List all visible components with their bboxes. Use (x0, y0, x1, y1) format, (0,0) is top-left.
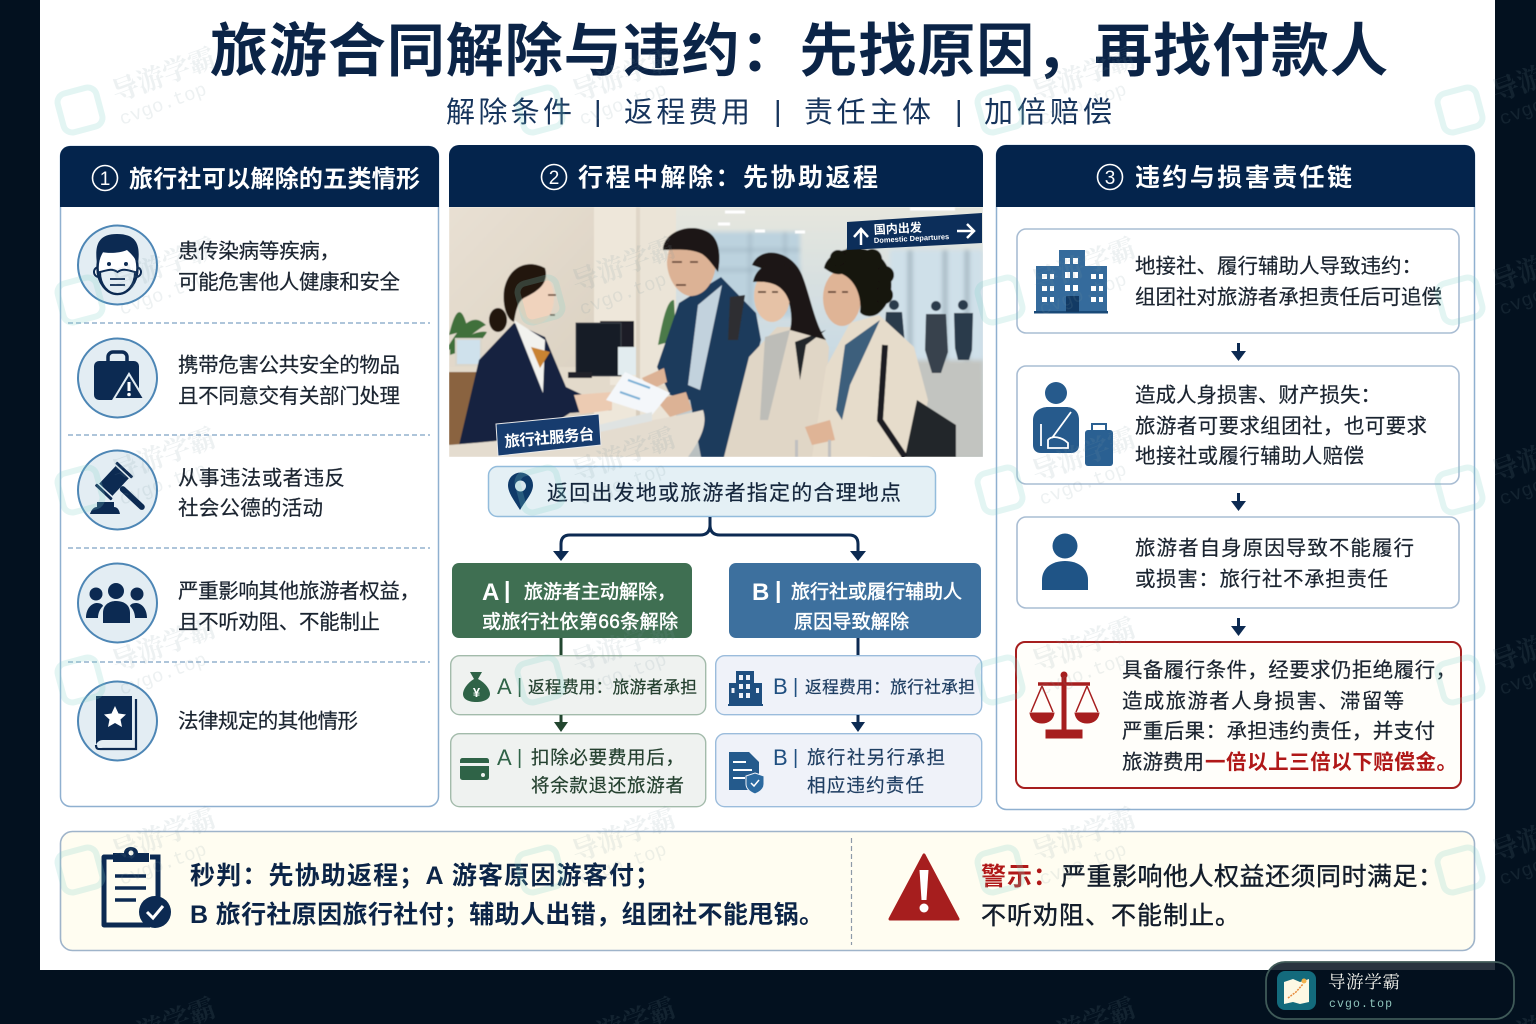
watermark pattern: 导游学霸 (108, 613, 220, 678)
watermark pattern: 导游学霸 (1028, 233, 1140, 298)
logo badge (1266, 962, 1514, 1019)
watermark pattern: 导游学霸 (1028, 43, 1140, 108)
sign: domestic departures (847, 213, 982, 250)
box: B liability: 相应违约责任 (807, 775, 924, 796)
text: dangerous goods: 且不同意交有关部门处理 (178, 385, 400, 408)
watermark pattern: 导游学霸 (1028, 803, 1140, 868)
text: warning (981, 863, 1443, 930)
box: B return cost: B (773, 674, 788, 699)
icon: money bag: ¥ (473, 685, 481, 700)
box: injury and property loss: 地接社或履行辅助人赔偿 (1135, 445, 1364, 468)
box: case B: 旅行社或履行辅助人 (791, 581, 962, 603)
box: traveller's own cause: 或损害：旅行社不承担责任 (1135, 568, 1388, 591)
arrow 1 (1231, 343, 1246, 361)
arrow 3 (1231, 618, 1246, 636)
icon: document shield (729, 752, 764, 794)
icon: law book (78, 682, 157, 760)
watermark pattern: 导游学霸 (1028, 613, 1140, 678)
box: case B: | (775, 577, 781, 603)
watermark pattern: cvgo.top (117, 649, 210, 701)
panel 1 header: 旅行社可以解除的五类情形 (129, 166, 420, 193)
watermark pattern: 导游学霸 (568, 233, 680, 298)
box: case A: 或旅行社依第66条解除 (482, 611, 678, 633)
watermark pattern: cvgo.top (577, 839, 670, 891)
box: refusal and punitive damages: 旅游费用 (1122, 751, 1204, 774)
box: case B: B (752, 579, 769, 606)
panel 2 header (449, 145, 983, 207)
subtitle: 解除条件 (446, 96, 572, 129)
watermark pattern: 导游学霸 (568, 43, 680, 108)
agent (459, 323, 612, 457)
panel: return assistance (449, 145, 983, 807)
logo text (1328, 972, 1400, 1011)
subtitle: | (594, 96, 602, 128)
box: refusal and punitive damages (1016, 642, 1461, 788)
box: B liability: | (793, 747, 798, 769)
icon: map pin (508, 472, 533, 510)
icon: bank card (460, 758, 489, 780)
destination box: 返回出发地或旅游者指定的合理地点 (547, 482, 901, 505)
arrow 2 (1231, 493, 1246, 511)
text: warning: 警示： (981, 863, 1058, 891)
box: A return cost: A (497, 674, 512, 699)
icon: scales of justice (1030, 672, 1099, 738)
text: dangerous goods (178, 354, 400, 408)
watermark pattern: 导游学霸 (568, 613, 680, 678)
box: A refund: A (497, 745, 512, 770)
watermark pattern: cvgo.top (1037, 839, 1130, 891)
icon: masked face (78, 226, 157, 304)
man (657, 277, 761, 457)
logo text: 导游学霸 (1328, 972, 1400, 992)
panel 1 header (60, 146, 439, 207)
box: case A: A (482, 579, 499, 606)
young woman (724, 327, 829, 457)
text: quick verdict: B 旅行社原因旅行社付；辅助人出错，组团社不能甩锅。 (190, 900, 824, 929)
subtitle: | (955, 96, 963, 128)
logo icon: map (1277, 971, 1316, 1010)
watermark pattern: 导游学霸 (108, 233, 220, 298)
panel: liability chain (996, 145, 1475, 810)
older woman (812, 315, 928, 457)
icon: luggage warning (78, 338, 157, 418)
text: warning: 严重影响他人权益还须同时满足： (1061, 863, 1443, 891)
text: quick verdict (190, 861, 824, 929)
text: harming other tourists: 严重影响其他旅游者权益， (178, 580, 420, 603)
watermark pattern: cvgo.top (577, 459, 670, 511)
box: local agency breach: 组团社对旅游者承担责任后可追偿 (1135, 286, 1442, 309)
watermark pattern: cvgo.top (117, 79, 210, 131)
box: case B: 原因导致解除 (794, 611, 909, 633)
box: refusal and punitive damages: 严重后果：承担违约责任，并支付 (1122, 720, 1435, 743)
box: A refund: 扣除必要费用后， (531, 747, 684, 768)
box: injury and property loss (1017, 366, 1459, 484)
monitors (600, 320, 635, 348)
watermark pattern: cvgo.top (1037, 269, 1130, 321)
front counter (449, 410, 705, 457)
icon: company building (728, 671, 763, 706)
panel: bottom takeaway (60, 832, 1474, 950)
text: harming other tourists: 且不听劝阻、不能制止 (178, 611, 380, 634)
box: A return cost: 返程费用：旅游者承担 (528, 678, 697, 697)
nameplate: service desk: 旅行社服务台 (504, 424, 595, 451)
destination box (488, 466, 936, 516)
paper (606, 372, 670, 415)
watermark pattern: cvgo.top (577, 79, 670, 131)
subtitle: | (774, 96, 782, 128)
subtitle: 加倍赔偿 (984, 96, 1112, 129)
red emphasis text: 一倍以上三倍以下赔偿金。 (1205, 750, 1457, 774)
plant (449, 312, 487, 355)
arrows: branch to A and B (553, 517, 866, 561)
box: refusal and punitive damages: 具备履行条件，经要求仍拒绝履行， (1122, 659, 1456, 682)
box: A refund: 将余款退还旅游者 (531, 775, 684, 796)
text: dangerous goods: 携带危害公共安全的物品 (178, 354, 400, 377)
text: illegal activity (178, 467, 345, 520)
watermark pattern: cvgo.top (577, 269, 670, 321)
panel 3 header: 违约与损害责任链 (1135, 164, 1352, 192)
watermark pattern: cvgo.top (1037, 459, 1130, 511)
watermark pattern: 导游学霸 (108, 803, 220, 868)
watermark pattern: cvgo.top (577, 649, 670, 701)
sign: domestic departures: 国内出发 (873, 220, 922, 237)
icon: money bag (463, 672, 490, 702)
box: case B (729, 563, 981, 638)
nameplate: service desk (496, 414, 601, 456)
watermark pattern: cvgo.top (117, 269, 210, 321)
watermark pattern: 导游学霸 (568, 423, 680, 488)
box: A return cost: | (517, 676, 522, 698)
box: refusal and punitive damages: 造成旅游者人身损害、滞留等 (1122, 690, 1404, 713)
logo text: cvgo.top (1329, 998, 1392, 1011)
text: other legal cases: 法律规定的其他情形 (178, 710, 358, 733)
text: contagious disease: 可能危害他人健康和安全 (178, 271, 400, 294)
box: case A (452, 563, 692, 638)
text: illegal activity: 社会公德的活动 (178, 497, 323, 520)
panel 3 header: 3 (1105, 168, 1115, 189)
box: case A: | (504, 577, 510, 603)
box: B liability: B (773, 745, 788, 770)
box: local agency breach (1017, 229, 1459, 333)
box: local agency breach: 地接社、履行辅助人导致违约： (1135, 255, 1422, 278)
text: contagious disease (178, 240, 400, 294)
icon: warning triangle (890, 855, 958, 919)
watermark pattern: 导游学霸 (108, 43, 220, 108)
box: A refund (451, 734, 706, 807)
subtitle: 责任主体 (804, 96, 931, 129)
panel 3 header (996, 145, 1475, 207)
watermark pattern: 导游学霸 (108, 423, 220, 488)
icon: person (1042, 534, 1088, 590)
box: B return cost (716, 656, 982, 715)
watermark pattern: cvgo.top (1037, 79, 1130, 131)
watermark pattern: 导游学霸 (568, 803, 680, 868)
sign: domestic departures: Domestic Departures (874, 232, 949, 245)
text: quick verdict: 秒判：先协助返程；A 游客原因游客付； (190, 861, 660, 890)
watermark pattern: 导游学霸 (1028, 423, 1140, 488)
icon: clipboard check (104, 847, 171, 928)
icon: office buildings (1034, 250, 1108, 314)
box: A refund: | (517, 747, 522, 769)
background travellers (884, 300, 973, 373)
icon: gavel (78, 450, 157, 530)
photo: service desk scene (449, 207, 983, 457)
icon: injured traveller (1033, 382, 1113, 466)
arrow: A continues (554, 715, 568, 732)
box: B return cost: | (793, 676, 798, 698)
box: injury and property loss: 旅游者可要求组团社，也可要求 (1135, 415, 1427, 438)
arrow: B continues (851, 715, 865, 732)
counter back (565, 376, 670, 396)
box: case A: 旅游者主动解除， (524, 581, 676, 603)
box: traveller's own cause: 旅游者自身原因导致不能履行 (1135, 537, 1414, 560)
box: B return cost: 返程费用：旅行社承担 (805, 678, 975, 697)
watermark pattern: cvgo.top (117, 459, 210, 511)
text: warning: 不听劝阻、不能制止。 (981, 902, 1240, 930)
panel 2 header: 行程中解除：先协助返程 (578, 163, 878, 192)
subtitle: 返程费用 (624, 96, 750, 129)
watermark pattern: cvgo.top (1037, 649, 1130, 701)
text: contagious disease: 患传染病等疾病， (178, 240, 340, 263)
panel 1 header: 1 (100, 169, 110, 190)
watermark pattern: cvgo.top (117, 839, 210, 891)
box: injury and property loss: 造成人身损害、财产损失： (1135, 384, 1381, 407)
panel 2 header: 2 (549, 168, 559, 189)
panel: five termination cases (60, 146, 439, 806)
text: illegal activity: 从事违法或者违反 (178, 467, 345, 490)
box: B liability (716, 734, 982, 807)
subtitle (446, 96, 1112, 129)
title: 旅游合同解除与违约：先找原因，再找付款人 (210, 19, 1388, 84)
text: harming other tourists (178, 580, 420, 634)
box: B liability: 旅行社另行承担 (807, 747, 945, 768)
box: A return cost (451, 656, 706, 715)
icon: group of people (78, 564, 157, 642)
box: traveller's own cause (1017, 517, 1459, 608)
